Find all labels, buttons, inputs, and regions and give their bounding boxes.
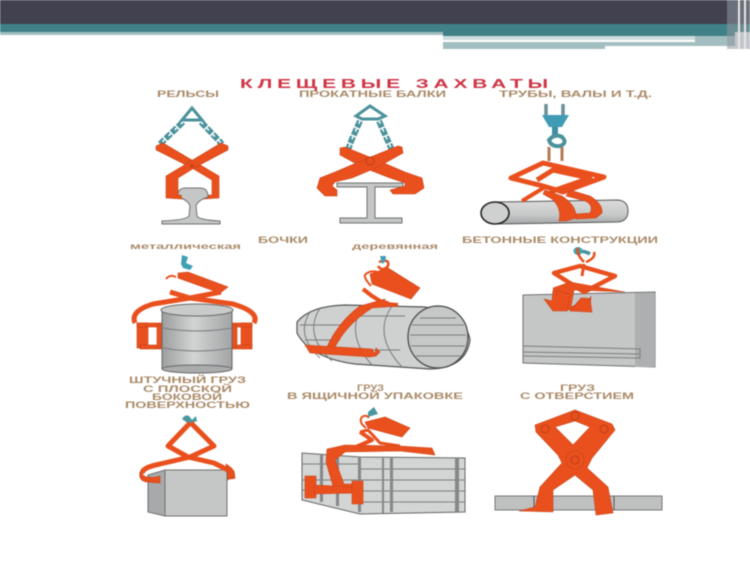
label: flat side load: С ПЛОСКОЙ [143,383,232,395]
figure: concrete grab [523,247,655,367]
figure: hole grab [495,410,662,515]
label: wooden: деревянная [352,241,438,251]
figure: rail grab [156,108,228,224]
label: load with hole: ГРУЗ [560,383,595,394]
figure: wooden barrel grab [297,256,470,369]
label: metal: металлическая [130,241,241,251]
figure: metal drum grab [134,255,255,373]
figure: pipe grab [481,104,628,224]
title: КЛЕЩЕВЫЕ ЗАХВАТЫ [240,76,553,91]
figure: flat box grab [140,415,234,516]
label: rails: РЕЛЬСЫ [157,89,219,100]
label: flat side load [125,374,250,411]
label: flat side load: БОКОВОЙ [152,391,222,403]
label: pipes and shafts: ТРУБЫ, ВАЛЫ И Т.Д. [499,89,652,100]
figure: crate grab [302,407,465,514]
label: concrete structures: БЕТОННЫЕ КОНСТРУКЦИИ [462,235,658,246]
label: flat side load: ПОВЕРХНОСТЬЮ [125,400,250,411]
label: barrels: БОЧКИ [258,235,308,246]
label: crated load: В ЯЩИЧНОЙ УПАКОВКЕ [287,390,463,402]
label: load with hole: С ОТВЕРСТИЕМ [520,391,634,402]
label: crated load [287,383,463,402]
label: flat side load: ШТУЧНЫЙ ГРУЗ [129,374,246,386]
figure: beam grab [317,106,424,223]
label: crated load: ГРУЗ [357,383,384,394]
header band [0,0,750,49]
label: load with hole [520,383,634,402]
label: rolled beams: ПРОКАТНЫЕ БАЛКИ [299,89,446,100]
